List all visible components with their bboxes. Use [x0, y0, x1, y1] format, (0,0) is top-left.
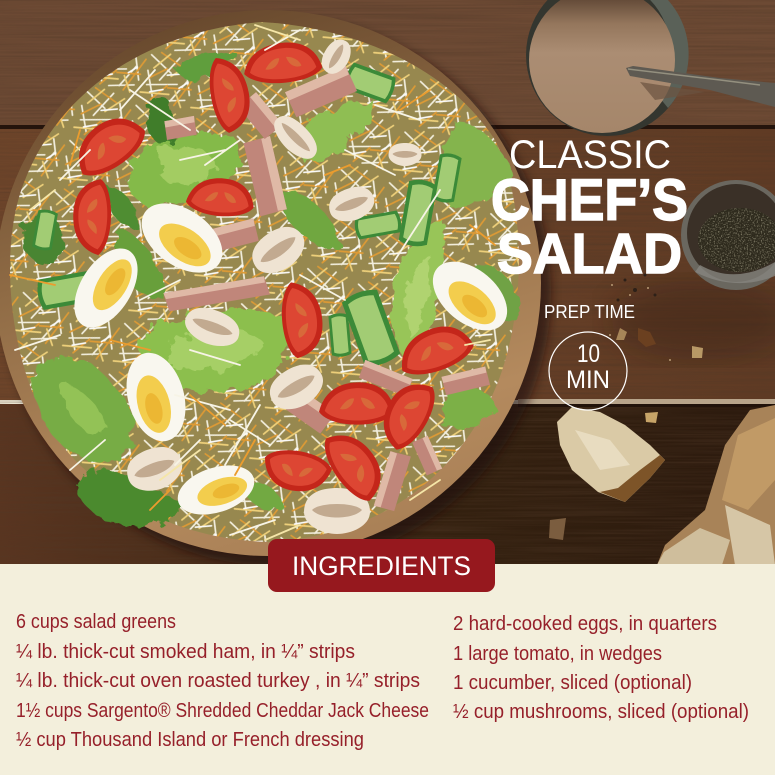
ingredient list: left column: ¼ lb. thick-cut smoked ham, in ¼” strips	[16, 641, 355, 663]
crumbs and pepper specks	[549, 274, 703, 540]
prep time circle: 10 min	[549, 332, 627, 410]
icon: pepper bowl	[681, 180, 775, 290]
ingredient list: right column: ½ cup mushrooms, sliced (optional)	[453, 701, 749, 723]
background: wood table	[0, 0, 775, 566]
icon: dressing bowl and spoon	[526, 0, 775, 136]
hard-cooked egg quarters	[61, 189, 520, 524]
salad base: shredded cheese	[10, 22, 519, 542]
prep time circle: 10 min: MIN	[566, 366, 610, 394]
title: Classic Chef's Salad: CLASSIC	[509, 133, 671, 177]
ingredient list: left column: ½ cup Thousand Island or French dressing	[16, 729, 364, 751]
ingredient list: right column	[453, 613, 749, 723]
lettuce leaves	[22, 50, 518, 526]
ingredients heading badge	[268, 539, 495, 592]
title: Classic Chef's Salad: CHEF’S	[491, 168, 688, 233]
prep time circle: 10 min: 10	[577, 340, 600, 368]
ingredient list: left column: 1½ cups Sargento® Shredded Cheddar Jack Cheese	[16, 700, 429, 722]
prep time label: PREP TIME	[544, 301, 635, 322]
ingredient list: left column: 6 cups salad greens	[16, 611, 176, 633]
icon: torn bread piece	[557, 407, 665, 502]
ingredient list: right column: 1 cucumber, sliced (optional)	[453, 672, 692, 694]
cucumber slices	[32, 62, 462, 370]
ingredient list: left column	[16, 611, 429, 751]
ingredient list: right column: 2 hard-cooked eggs, in quarters	[453, 613, 717, 635]
title: Classic Chef's Salad	[491, 133, 688, 286]
ingredients heading badge: INGREDIENTS	[292, 551, 471, 581]
icon: salad bowl	[0, 10, 551, 566]
ingredients panel	[0, 539, 775, 775]
ham and turkey strips	[163, 65, 491, 513]
ingredient list: right column: 1 large tomato, in wedges	[453, 643, 662, 665]
icon: baguette	[657, 405, 775, 565]
title: Classic Chef's Salad: SALAD	[497, 222, 682, 286]
tomato wedges	[65, 39, 478, 508]
ingredient list: left column: ¼ lb. thick-cut oven roasted turkey , in ¼” strips	[16, 670, 420, 692]
mushroom slices	[121, 35, 422, 534]
loose cheese shreds	[10, 25, 495, 540]
